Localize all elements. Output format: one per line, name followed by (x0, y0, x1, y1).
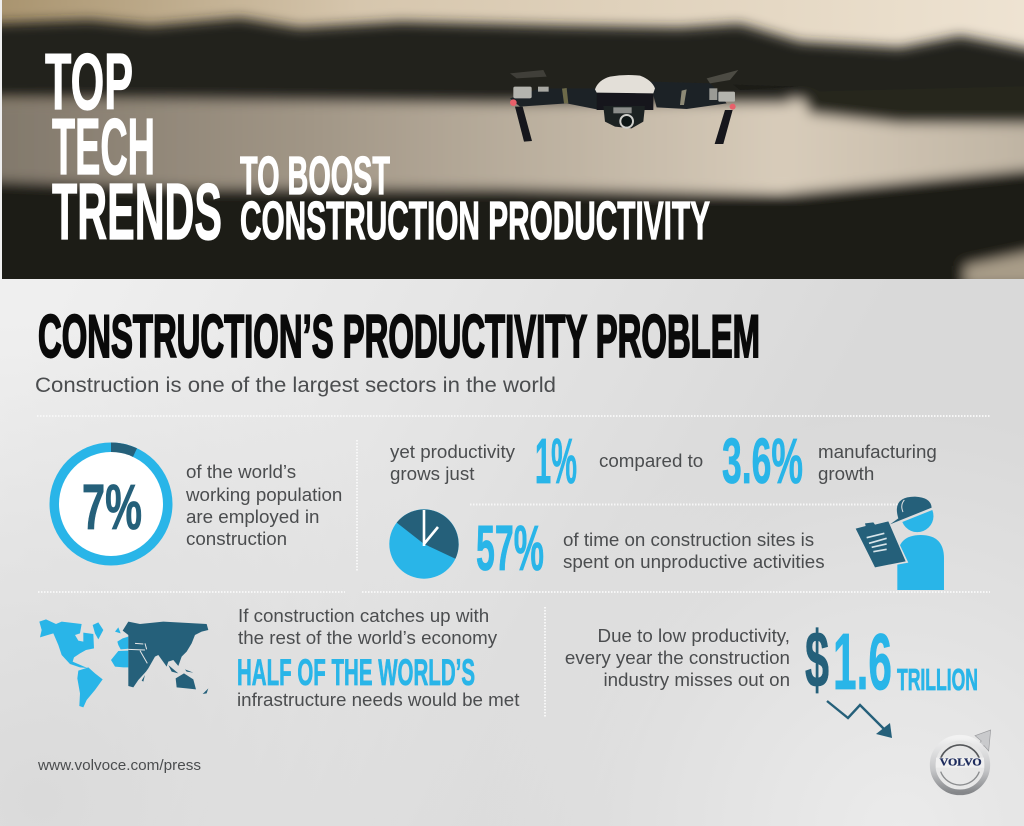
logo: Volvo: VOLVO (940, 758, 982, 769)
stat: 57 percent unproductive: of time on construction sites is (563, 529, 814, 550)
stat: productivity growth: 1% (535, 425, 577, 497)
number: $1.6 trillion (805, 615, 978, 706)
text: working population: of the world’s (186, 461, 296, 482)
logo: Volvo (933, 730, 991, 792)
text: missed value: Due to low productivity, (598, 625, 790, 646)
subheading: Construction is one of the largest sectors in the world (35, 374, 556, 397)
text: working population: are employed in (186, 506, 319, 527)
title: TECH (52, 102, 155, 191)
title: TOP (45, 37, 133, 126)
text: working population: construction (186, 528, 287, 549)
stat: 57 percent unproductive: spent on unproductive activities (563, 551, 825, 572)
icon: donut ring (50, 442, 172, 566)
stat: productivity growth: yet productivity (390, 441, 516, 462)
text: working population: working population (185, 484, 342, 505)
icon: world map (39, 619, 208, 707)
stat: 7 percent of working population (50, 442, 342, 566)
number: 7%: 7% (82, 471, 142, 543)
stat: productivity growth: grows just (390, 463, 475, 484)
icon: worker with clipboard (854, 497, 944, 590)
number: $1.6 trillion: $ (805, 615, 829, 704)
stat: productivity growth: manufacturing (818, 441, 937, 462)
text: half of the world's infrastructure: If construction catches up with (238, 605, 489, 626)
number: $1.6 trillion: 1.6 (833, 617, 892, 706)
icon: drone (510, 70, 798, 144)
text: half of the world's infrastructure: the rest of the world’s economy (238, 627, 498, 648)
number: 57%: 57% (476, 512, 544, 584)
text: half of the world's infrastructure: infrastructure needs would be met (237, 689, 520, 710)
title: TO BOOST (240, 146, 390, 206)
title (45, 37, 710, 256)
text: missed value: every year the construction (565, 647, 790, 668)
text: half of the world's infrastructure (237, 605, 520, 710)
stat: productivity growth: compared to (599, 450, 703, 471)
text: missed value: industry misses out on (603, 669, 790, 690)
icon: clock pie chart (389, 509, 459, 579)
arrow: falling trend (827, 701, 892, 738)
number: 3.6%: 3.6% (722, 425, 803, 497)
header photo: blurred lake landscape (0, 0, 1024, 300)
source url: www.volvoce.com/press (37, 757, 201, 774)
title: TRENDS (52, 167, 222, 256)
text: half of the world's infrastructure: HALF OF THE WORLD’S (237, 652, 475, 693)
stat: productivity growth: growth (818, 463, 874, 484)
stat: productivity growth (390, 425, 937, 497)
stat: 57 percent unproductive (389, 497, 944, 590)
